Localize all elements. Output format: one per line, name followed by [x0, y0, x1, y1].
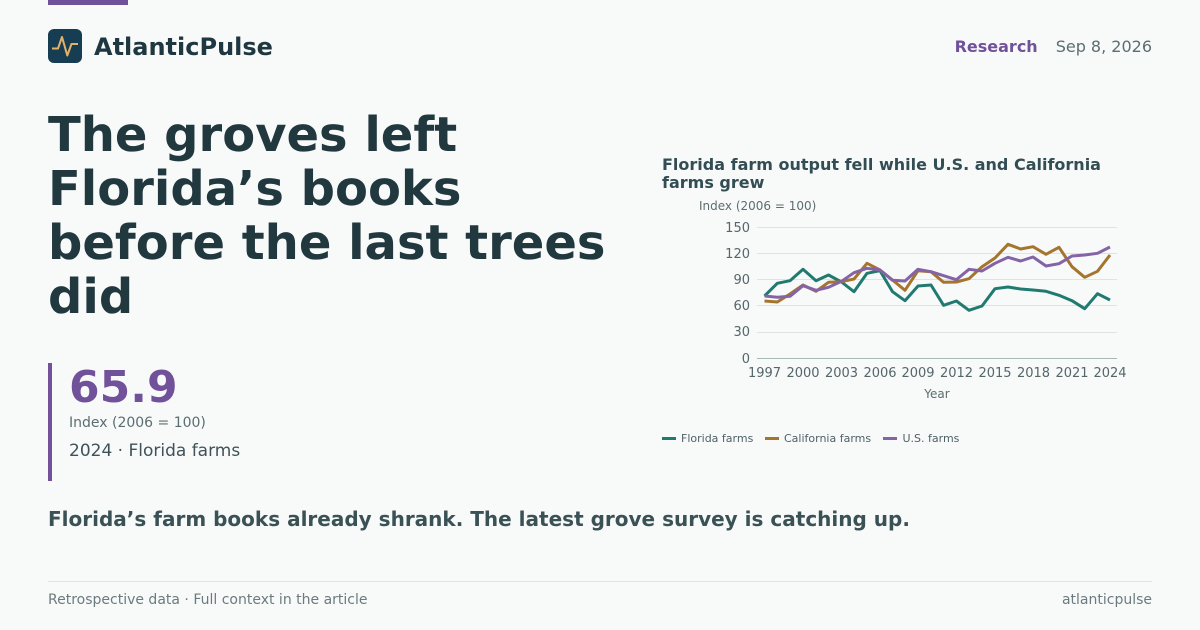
footer brand: atlanticpulse	[1062, 592, 1152, 608]
takeaway sentence: Florida’s farm books already shrank. The latest grove survey is catching up.	[48, 507, 910, 531]
stat callout	[48, 363, 268, 481]
x axis labels: 1997	[748, 366, 781, 381]
line chart	[699, 199, 1127, 401]
y axis labels: 60	[733, 299, 750, 314]
footer	[48, 581, 1152, 617]
x axis labels: 2012	[940, 366, 973, 381]
section and date: Research Sep 8, 2026	[955, 37, 1152, 56]
brand name: AtlanticPulse	[94, 33, 273, 61]
headline	[48, 107, 605, 325]
x axis title: Year	[923, 387, 950, 401]
y axis labels: 30	[733, 325, 750, 340]
headline: did	[48, 269, 133, 325]
y axis labels: 0	[742, 352, 750, 367]
chart title: Florida farm output fell while U.S. and California	[662, 155, 1101, 174]
line: Florida farms	[764, 269, 1110, 310]
headline: Florida’s books	[48, 161, 461, 217]
x axis labels: 2006	[863, 366, 897, 381]
y axis title: Index (2006 = 100)	[699, 199, 816, 213]
stat unit: Index (2006 = 100)	[69, 415, 206, 431]
x axis labels: 2024	[1093, 366, 1127, 381]
y axis labels: 120	[725, 247, 750, 262]
footer note: Retrospective data · Full context in the article	[48, 592, 367, 608]
brand header	[48, 29, 273, 63]
legend: Florida farms: Florida farms	[681, 432, 753, 445]
x axis labels: 2009	[901, 366, 935, 381]
y axis labels	[725, 221, 750, 367]
stat label: 2024 · Florida farms	[69, 441, 240, 461]
chart legend	[662, 432, 959, 445]
chart title: farms grew	[662, 173, 764, 192]
icon: pulse logo	[48, 29, 82, 63]
headline: The groves left	[48, 107, 457, 163]
y axis labels: 90	[733, 273, 750, 288]
y axis labels: 150	[725, 221, 750, 236]
headline: before the last trees	[48, 215, 605, 271]
legend: California farms: California farms	[784, 432, 871, 445]
x axis labels: 2015	[978, 366, 1012, 381]
x axis labels	[748, 366, 1127, 381]
x axis labels: 2000	[786, 366, 820, 381]
x axis labels: 2018	[1017, 366, 1050, 381]
line: U.S. farms	[764, 247, 1110, 297]
line: California farms	[764, 244, 1110, 302]
stat value: 65.9	[69, 362, 178, 413]
top accent bar	[48, 0, 128, 5]
x axis labels: 2003	[825, 366, 858, 381]
chart title	[662, 155, 1101, 192]
legend: U.S. farms: U.S. farms	[902, 432, 959, 445]
x axis labels: 2021	[1055, 366, 1089, 381]
